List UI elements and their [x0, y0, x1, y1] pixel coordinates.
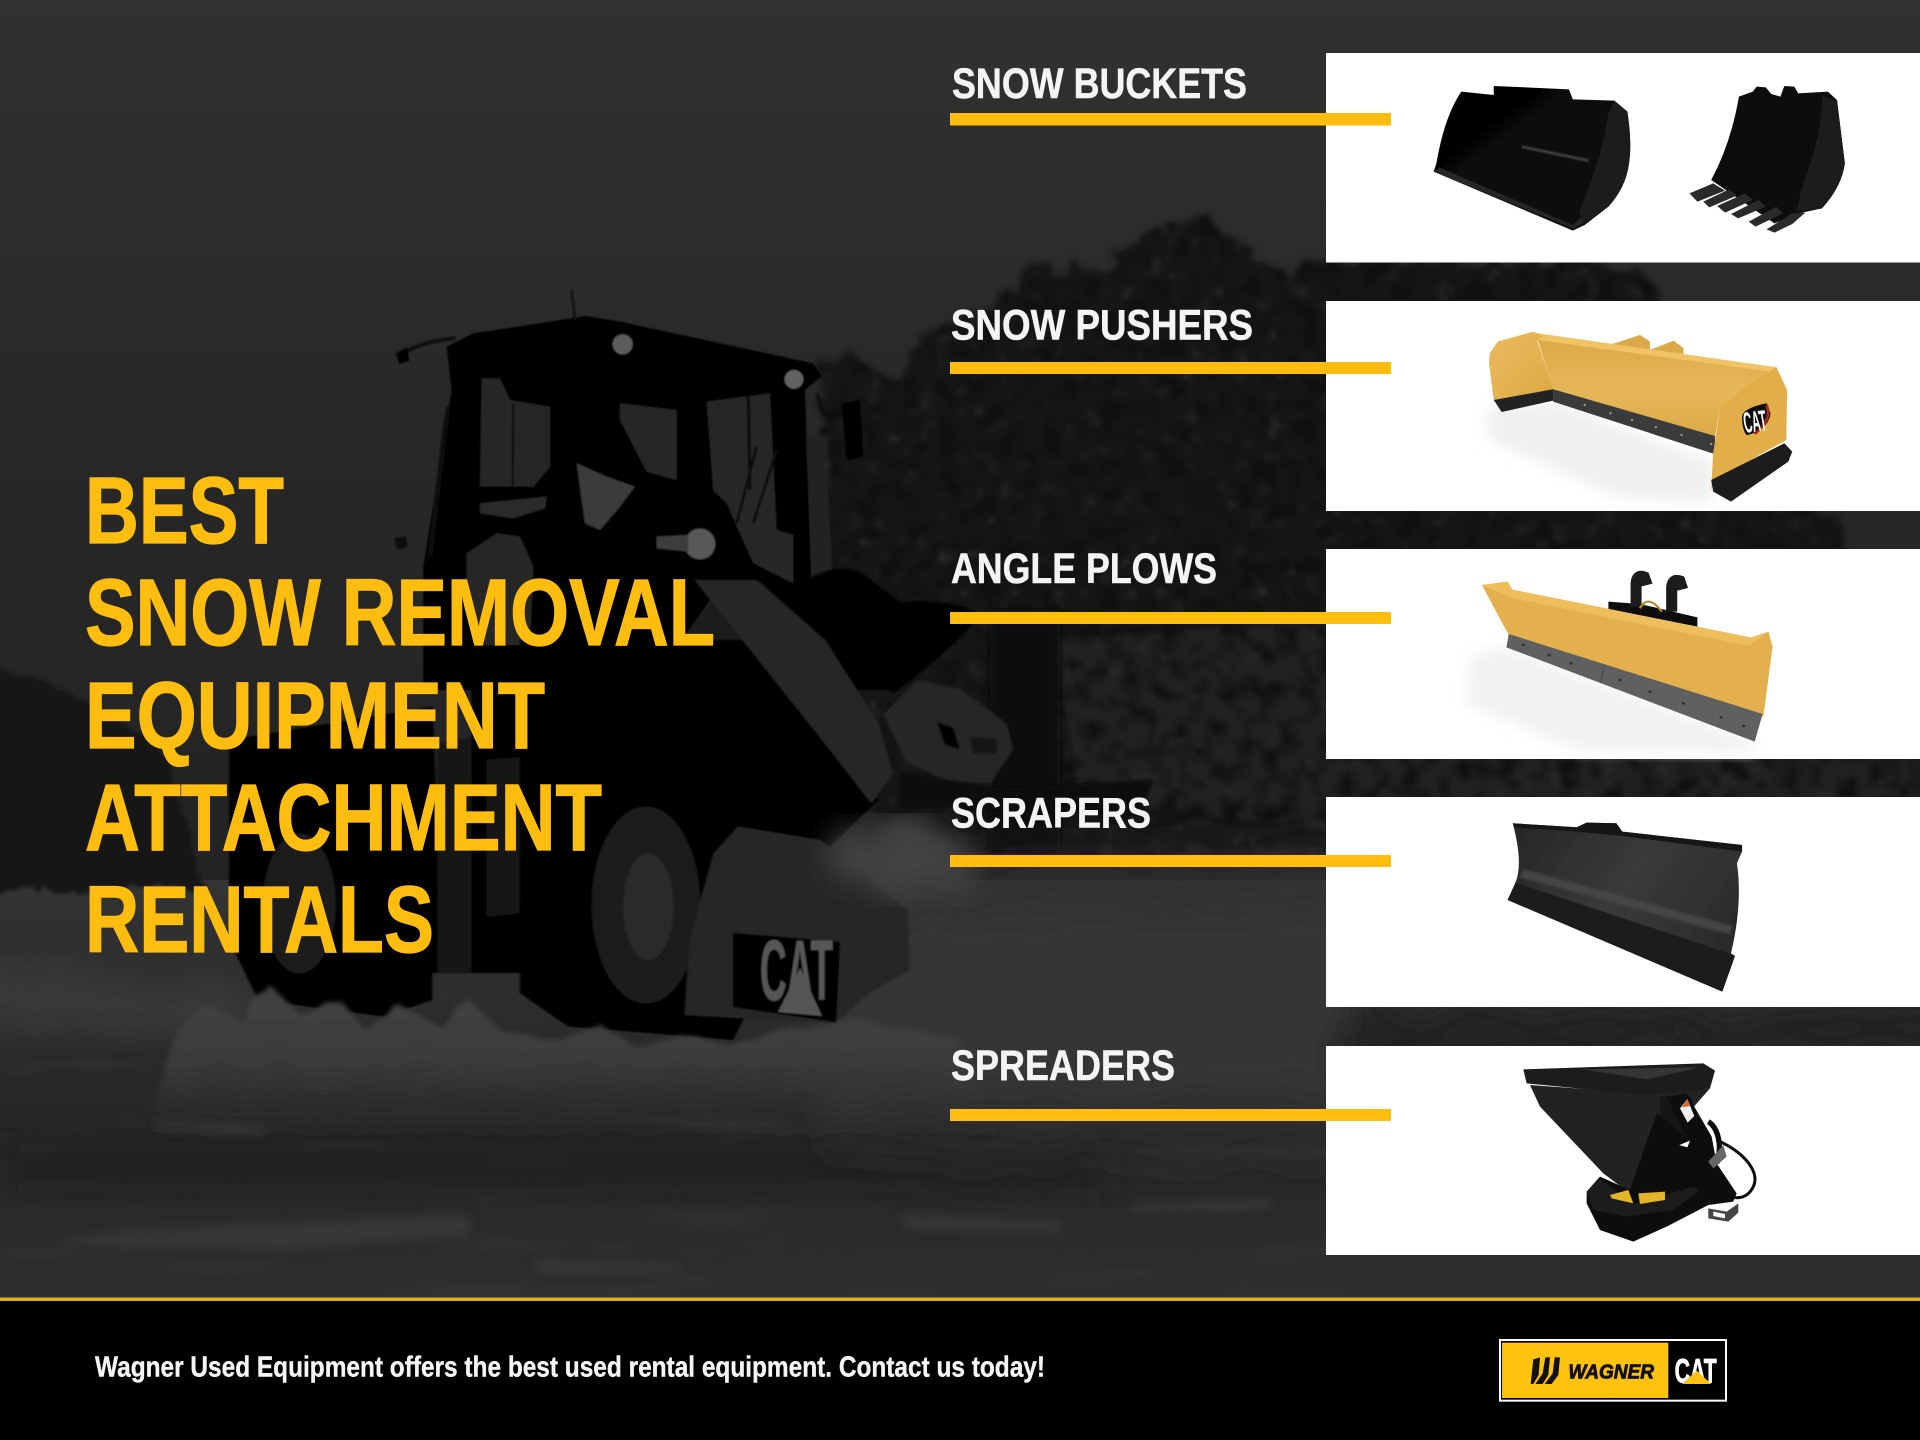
- logo: Wagner Cat: CAT: [1675, 1352, 1717, 1390]
- loader front arm: [807, 569, 1153, 815]
- label: snow buckets: SNOW BUCKETS: [952, 61, 1247, 108]
- icon: yellow snow pusher: [1486, 332, 1792, 503]
- panel: spreaders image: [1326, 1046, 1920, 1255]
- Cat plate on the blower: [733, 923, 840, 1022]
- label: scrapers: SCRAPERS: [951, 790, 1151, 838]
- icon: yellow snow pusher: CAT: [1741, 404, 1769, 439]
- background photo: wheel loader clearing snow: CAT: [760, 923, 833, 1019]
- panel: snow buckets image: [1326, 53, 1920, 262]
- label: snow pushers: [950, 302, 1391, 374]
- title: [85, 458, 715, 973]
- loader rear: [228, 690, 521, 1017]
- title: SNOW REMOVAL: [85, 560, 715, 666]
- icon: yellow angle plow: [1466, 575, 1773, 753]
- icon: excavator bucket with teeth: [1689, 86, 1845, 233]
- left snow pile: [0, 970, 246, 1034]
- label: scrapers: [950, 790, 1391, 867]
- panel: scrapers image: [1326, 797, 1920, 1007]
- loader cab: [394, 290, 900, 690]
- logo: Wagner Cat: [1500, 1340, 1726, 1401]
- icon: black scraper blade: [1508, 823, 1742, 992]
- left distant trees: [0, 665, 205, 890]
- logo: Wagner Cat: WAGNER: [1568, 1361, 1654, 1384]
- label: angle plows: ANGLE PLOWS: [951, 546, 1217, 593]
- snow mist on the right: [818, 844, 1920, 1142]
- title: BEST: [85, 458, 284, 564]
- panel: snow pushers image: [1326, 301, 1920, 511]
- label: spreaders: SPREADERS: [951, 1043, 1175, 1090]
- label: spreaders: [950, 1043, 1391, 1121]
- snow burst by the blower: [830, 824, 970, 896]
- snow puffs along the ground: [162, 984, 955, 1100]
- shaded trunk gap: [990, 610, 1060, 850]
- loader front wheel and arm: [520, 580, 910, 1040]
- label: angle plows: [950, 546, 1391, 624]
- icon: Wagner stripes: [1531, 1357, 1560, 1384]
- background trees: [820, 212, 1920, 860]
- footer text: Wagner Used Equipment offers the best used rental equipment. Contact us today!: [95, 1352, 1045, 1384]
- lighter leaves at the tree base: [1053, 620, 1920, 830]
- icon: loader bucket: [1434, 86, 1630, 231]
- icon: Cat triangle: [1682, 1371, 1711, 1384]
- label: snow buckets: [950, 61, 1391, 126]
- footer band: [0, 1298, 1920, 1440]
- label: snow pushers: SNOW PUSHERS: [951, 302, 1253, 350]
- panel: angle plows image: [1326, 549, 1920, 759]
- icon: black material spreader: [1523, 1063, 1755, 1242]
- background ground: [0, 880, 1920, 1300]
- title: ATTACHMENT: [85, 765, 602, 871]
- title: RENTALS: [85, 867, 434, 973]
- title: EQUIPMENT: [85, 663, 545, 769]
